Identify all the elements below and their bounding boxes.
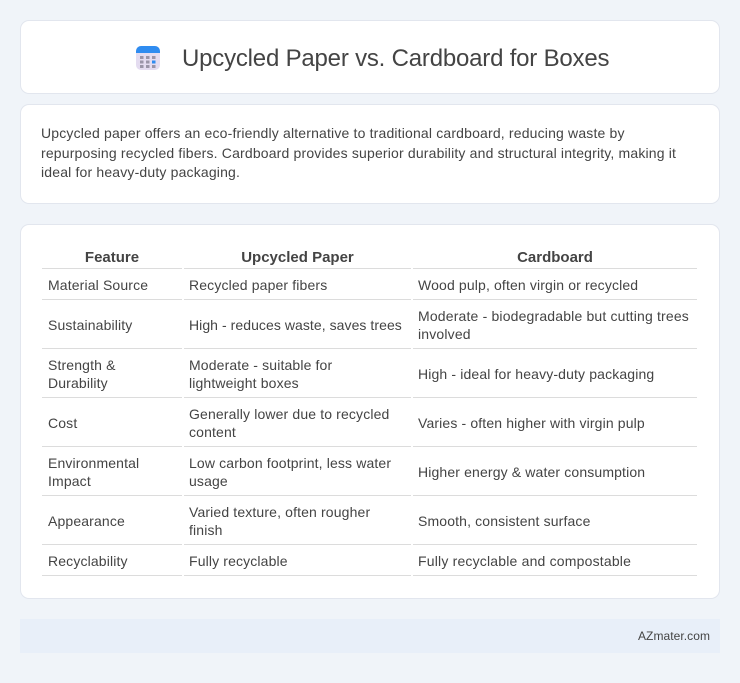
intro text — [41, 125, 676, 180]
row: environmental impact — [48, 455, 645, 489]
row: sustainability: Moderate - biodegradable but cutting trees — [418, 308, 689, 324]
row: recyclability: Fully recyclable — [189, 553, 288, 569]
row: material source: Recycled paper fibers — [189, 277, 327, 293]
row: cost: Generally lower due to recycled — [189, 406, 389, 422]
header panel — [20, 20, 720, 94]
row: sustainability: Sustainability — [48, 317, 132, 333]
row: material source: Material Source — [48, 277, 148, 293]
row: appearance: Appearance — [48, 513, 125, 529]
row: recyclability: Recyclability — [48, 553, 128, 569]
column headers: Upcycled Paper — [241, 249, 354, 266]
row: sustainability: involved — [418, 326, 471, 342]
row: sustainability — [48, 308, 689, 342]
row: recyclability: Fully recyclable and compostable — [418, 553, 631, 569]
row: strength and durability: Moderate - suitable for — [189, 357, 332, 373]
footer credit: AZmater.com — [638, 629, 710, 643]
column headers: Cardboard — [517, 249, 593, 266]
row: environmental impact: Environmental — [48, 455, 139, 471]
table panel — [20, 224, 720, 599]
footer bar — [20, 619, 720, 653]
row: appearance: Varied texture, often rougher — [189, 504, 370, 520]
icon: calendar — [136, 46, 160, 70]
row: appearance: Smooth, consistent surface — [418, 513, 591, 529]
row: material source — [48, 277, 638, 293]
intro text: ideal for heavy-duty packaging. — [41, 164, 240, 180]
intro text: repurposing recycled fibers. Cardboard provides superior durability and structural integrity, making it — [41, 145, 676, 161]
row: cost: Varies - often higher with virgin pulp — [418, 415, 645, 431]
row: recyclability — [48, 553, 631, 569]
row: strength and durability: lightweight boxes — [189, 375, 299, 391]
row: cost: Cost — [48, 415, 77, 431]
row: strength and durability — [48, 357, 654, 391]
row: environmental impact: usage — [189, 473, 228, 489]
row: appearance: finish — [189, 522, 223, 538]
row: environmental impact: Higher energy & water consumption — [418, 464, 645, 480]
row: environmental impact: Impact — [48, 473, 91, 489]
column headers — [85, 249, 593, 266]
row: environmental impact: Low carbon footprint, less water — [189, 455, 391, 471]
comparison table — [42, 249, 697, 576]
row: strength and durability: High - ideal for heavy-duty packaging — [418, 366, 654, 382]
row: cost — [48, 406, 645, 440]
intro panel — [20, 104, 720, 204]
intro text: Upcycled paper offers an eco-friendly alternative to traditional cardboard, reducing waste by — [41, 125, 625, 141]
title: Upcycled Paper vs. Cardboard for Boxes — [182, 45, 609, 72]
row: strength and durability: Strength & — [48, 357, 116, 373]
row: strength and durability: Durability — [48, 375, 108, 391]
row: sustainability: High - reduces waste, saves trees — [189, 317, 402, 333]
column headers: Feature — [85, 249, 139, 266]
row: appearance — [48, 504, 591, 538]
row: material source: Wood pulp, often virgin or recycled — [418, 277, 638, 293]
row: cost: content — [189, 424, 236, 440]
